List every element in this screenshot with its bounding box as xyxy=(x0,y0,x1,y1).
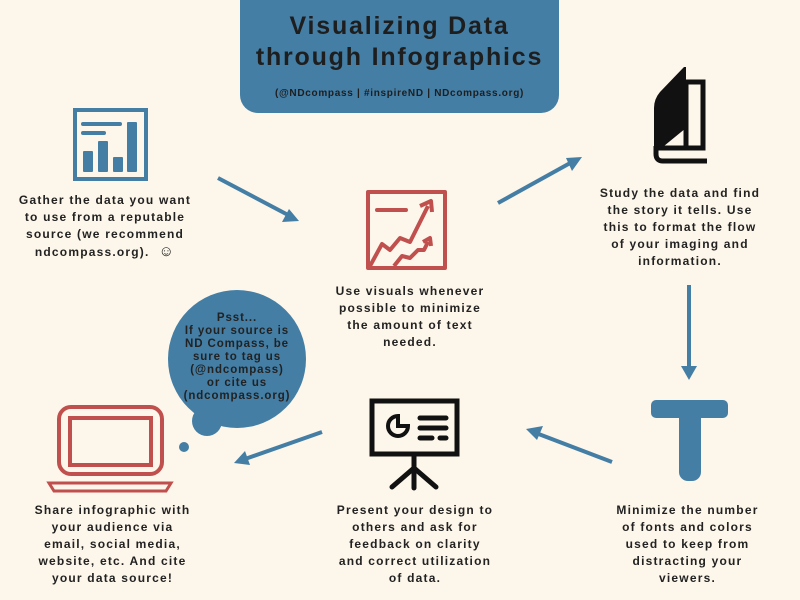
speech bubble xyxy=(168,290,306,452)
text: share: your data source! xyxy=(52,571,173,585)
text: bubble: or cite us xyxy=(207,377,267,389)
text: study: Study the data and find xyxy=(600,186,760,200)
title xyxy=(256,12,543,71)
text: bubble xyxy=(184,312,290,402)
icon: presentation board xyxy=(372,401,457,488)
text: present xyxy=(337,503,493,585)
text: visuals: needed. xyxy=(383,335,437,349)
text: share: Share infographic with xyxy=(35,503,190,517)
text: visuals: Use visuals whenever xyxy=(336,284,484,298)
arrow: gather to visuals xyxy=(218,178,299,222)
text: gather: source (we recommend xyxy=(26,227,184,241)
text: gather: to use from a reputable xyxy=(25,210,185,224)
arrow: study to T xyxy=(681,285,697,380)
text: present: feedback on clarity xyxy=(349,537,481,551)
text: bubble: (ndcompass.org) xyxy=(184,390,290,402)
text: bubble: (@ndcompass) xyxy=(190,364,284,376)
text: share xyxy=(35,503,190,585)
text: study xyxy=(600,186,760,268)
text: visuals: possible to minimize xyxy=(339,301,481,315)
text: gather: Gather the data you want xyxy=(19,193,191,207)
text: minimize: used to keep from xyxy=(626,537,749,551)
text: bubble: ND Compass, be xyxy=(185,338,289,350)
title box xyxy=(240,0,559,113)
arrow: present to share xyxy=(234,432,322,465)
text: minimize: of fonts and colors xyxy=(622,520,753,534)
text: gather xyxy=(19,193,191,260)
arrow: T to present xyxy=(526,426,612,462)
text: present: of data. xyxy=(389,571,441,585)
text: bubble: sure to tag us xyxy=(193,351,281,363)
text: visuals xyxy=(336,284,484,349)
icon: book xyxy=(654,67,707,161)
text: gather: ndcompass.org). ☺ xyxy=(35,243,175,260)
text: minimize: viewers. xyxy=(659,571,716,585)
arrow: visuals to study xyxy=(498,157,582,203)
icon: laptop xyxy=(49,407,171,491)
text: share: email, social media, xyxy=(44,537,181,551)
icon: bar chart xyxy=(75,110,146,179)
text: study: information. xyxy=(638,254,722,268)
text: bubble: Psst... xyxy=(217,312,257,324)
text: minimize xyxy=(616,503,759,585)
text: study: of your imaging and xyxy=(611,237,749,251)
text: study: this to format the flow xyxy=(604,220,756,234)
text: minimize: Minimize the number xyxy=(616,503,759,517)
icon: rising chart xyxy=(368,192,445,268)
title: through Infographics xyxy=(256,43,543,71)
icon: letter T xyxy=(651,400,728,481)
text: minimize: distracting your xyxy=(633,554,742,568)
text: present: others and ask for xyxy=(352,520,478,534)
title: Visualizing Data xyxy=(289,12,510,40)
text: present: Present your design to xyxy=(337,503,493,517)
text: share: website, etc. And cite xyxy=(38,554,186,568)
subtitle: (@NDcompass | #inspireND | NDcompass.org) xyxy=(275,88,524,99)
text: bubble: If your source is xyxy=(185,325,289,337)
text: present: and correct utilization xyxy=(339,554,491,568)
text: study: the story it tells. Use xyxy=(608,203,752,217)
text: share: your audience via xyxy=(52,520,173,534)
text: visuals: the amount of text xyxy=(347,318,473,332)
